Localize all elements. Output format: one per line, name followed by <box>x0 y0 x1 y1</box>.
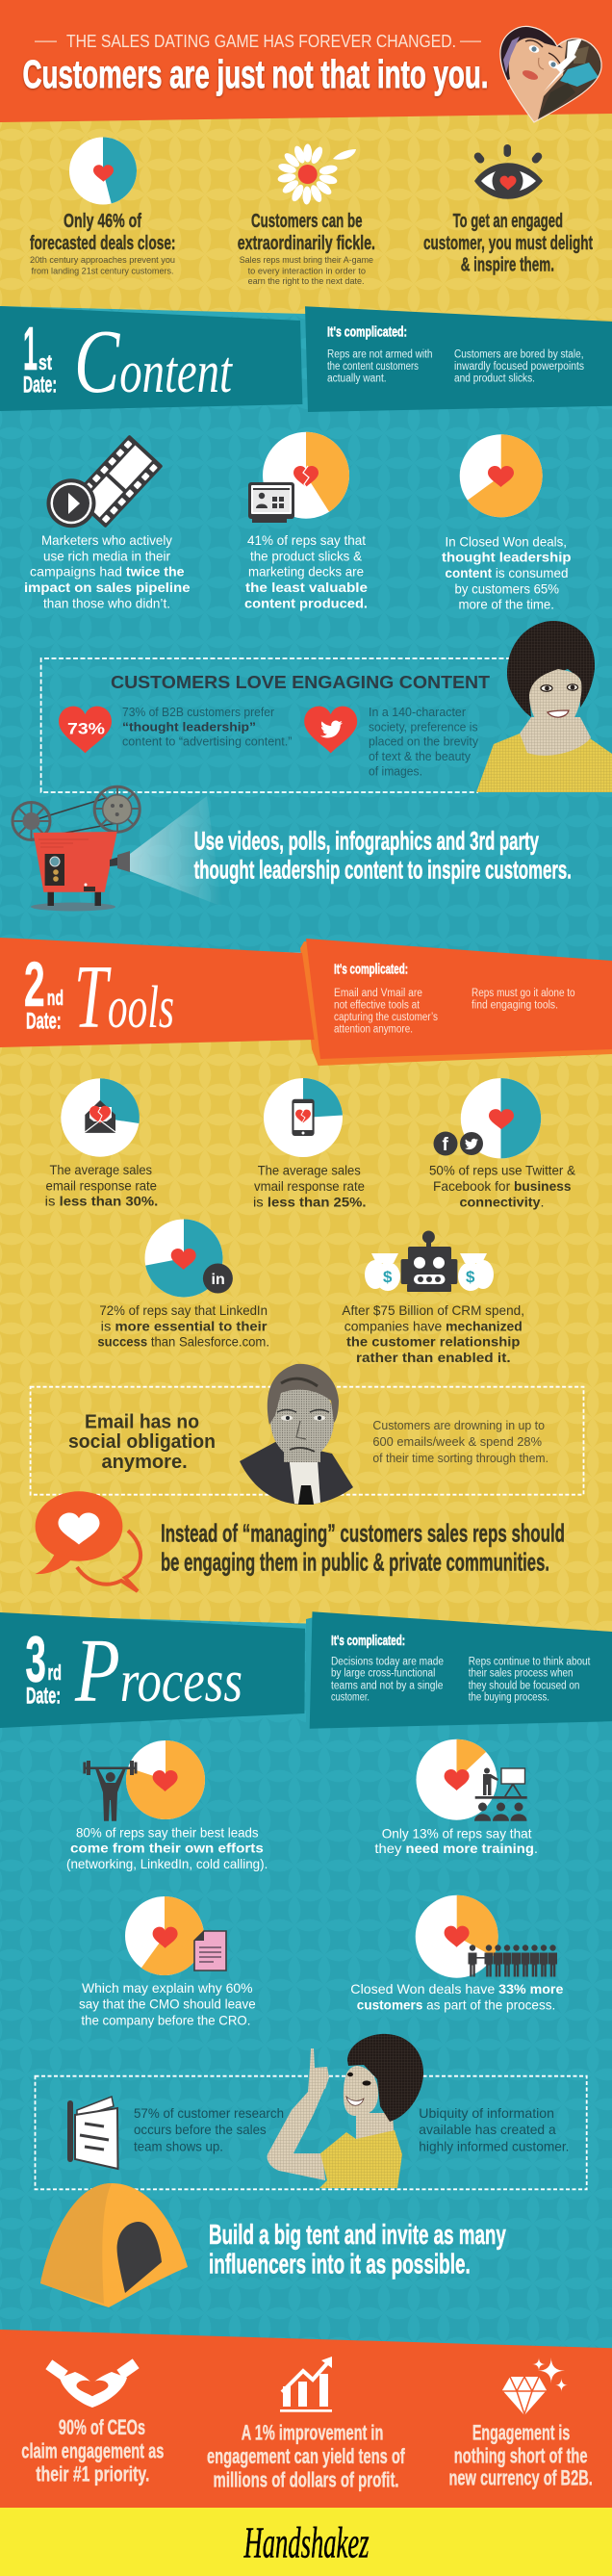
text: 600 emails/week & spend 28% <box>372 1434 542 1449</box>
text: ubiquity: Ubiquity of information <box>419 2105 554 2121</box>
text: campaigns had twice the <box>30 564 185 580</box>
footer band <box>0 2330 612 2509</box>
stat: linkedin <box>97 1219 269 1350</box>
text <box>30 255 175 277</box>
text: it's complicated: not effective tools at <box>334 1000 421 1012</box>
text: The average sales <box>258 1163 361 1178</box>
stat: training <box>374 1739 538 1856</box>
text: it's complicated: It's complicated: <box>331 1633 405 1649</box>
text: companies have mechanized <box>344 1318 523 1333</box>
icon: heart with twitter bird <box>304 707 357 753</box>
text: content produced. <box>244 595 368 610</box>
text: it's complicated: actually want. <box>327 374 387 385</box>
text: customers as part of the process. <box>357 1997 555 2013</box>
text: say that the CMO should leave <box>79 1996 256 2012</box>
text: it's complicated: Decisions today are made <box>331 1656 444 1667</box>
heading: & inspire them. <box>461 255 554 276</box>
text <box>45 1162 158 1209</box>
text <box>350 1981 564 2013</box>
text: it's complicated: their sales process when <box>469 1668 574 1680</box>
text <box>97 1302 269 1350</box>
text: thought leadership <box>122 705 293 749</box>
heading <box>238 211 375 254</box>
text: brevity: of images. <box>369 763 422 778</box>
text: it's complicated: teams and not by a single <box>331 1680 443 1691</box>
text: thought leadership: 73% of B2B customers prefer <box>122 705 275 719</box>
stat: rich media <box>24 434 191 610</box>
heading: Customers can be <box>251 211 362 232</box>
text: 57 percent: 57% of customer research <box>134 2105 284 2121</box>
icon: heart 73% <box>59 707 112 753</box>
text: it's complicated: capturing the customer’s <box>334 1012 438 1023</box>
icon: rising chart <box>280 2357 332 2412</box>
text: brevity: placed on the brevity <box>369 734 478 749</box>
text <box>24 532 191 610</box>
text: success than Salesforce.com. <box>97 1334 269 1350</box>
heading <box>68 1411 216 1473</box>
stat: CRM spend <box>342 1230 524 1365</box>
section header: 2nd date tools <box>0 938 612 1066</box>
panel: customer research <box>35 2034 587 2189</box>
pie chart: 13 percent <box>416 1739 497 1820</box>
text: 50% of reps use Twitter & <box>429 1163 576 1178</box>
icon: linkedin <box>203 1263 233 1294</box>
illustration: tent <box>40 2183 188 2307</box>
pie chart: 46 percent <box>69 137 137 204</box>
pie chart: 33 percent <box>416 1895 498 1978</box>
heading: Only 46% of <box>64 211 141 232</box>
text: they need more training . <box>374 1841 538 1856</box>
icon: speech bubbles with heart <box>35 1491 140 1591</box>
text <box>342 1302 524 1365</box>
text: brevity: In a 140-character <box>369 705 467 719</box>
heading: CUSTOMERS LOVE ENGAGING CONTENT <box>111 672 491 692</box>
icon: presenter and audience <box>474 1767 527 1821</box>
heading: 1st date: Date: <box>23 372 57 398</box>
text: it's complicated: they should be focused on <box>469 1680 579 1691</box>
text: thought leadership: “thought leadership” <box>122 719 256 734</box>
pie chart: 41 percent <box>263 432 349 519</box>
stat: engagement profit <box>207 2357 405 2491</box>
text: thought leadership <box>442 550 572 565</box>
heading: anymore. <box>102 1452 188 1473</box>
text: 80% of reps say their best leads <box>76 1824 259 1840</box>
text: Only 13% of reps say that <box>382 1825 532 1841</box>
text: brevity: society, preference is <box>369 719 478 734</box>
pie chart: 60 percent <box>125 1896 204 1975</box>
text: the company before the CRO. <box>81 2012 250 2027</box>
heading: extraordinarily fickle. <box>238 233 375 254</box>
icon: handshake and crowd <box>468 1945 557 1977</box>
illustration: film projector <box>13 786 222 911</box>
text: email response rate <box>46 1177 157 1193</box>
icon: heart 73%: 73% <box>67 720 105 738</box>
heading: process: Process <box>74 1621 242 1721</box>
stat: new currency <box>448 2357 593 2490</box>
text: rather than enabled it. <box>356 1350 511 1365</box>
text <box>207 2420 405 2491</box>
text: millions of dollars of profit. <box>214 2467 399 2491</box>
icon: linkedin: in <box>212 1272 225 1288</box>
text: it's complicated: It's complicated: <box>327 323 407 340</box>
callout: build a big tent: influencers into it as possible. <box>209 2250 471 2280</box>
text: engagement can yield tens of <box>207 2444 405 2468</box>
text: Which may explain why 60% <box>82 1980 252 1996</box>
icon: weightlifter <box>83 1761 137 1821</box>
text: is less than 30%. <box>45 1194 158 1209</box>
heading: 1st date: 1 <box>23 314 38 383</box>
heading <box>423 211 593 276</box>
text: the customer relationship <box>346 1334 520 1350</box>
text: In Closed Won deals, <box>445 533 567 549</box>
header band <box>0 0 612 130</box>
text: it's complicated <box>334 962 575 1035</box>
text: brevity <box>369 705 478 778</box>
heading: 3rd date: 3 <box>25 1623 46 1696</box>
section header: 1st date content <box>0 306 612 412</box>
text <box>253 1163 366 1209</box>
text: is less than 25%. <box>253 1194 366 1209</box>
text: 72% of reps say that LinkedIn <box>99 1302 268 1318</box>
stat: thought leadership 65 percent <box>442 434 572 612</box>
heading: Email has no <box>85 1411 199 1432</box>
text: content is consumed <box>445 565 568 580</box>
text <box>244 532 368 610</box>
callout: use videos <box>194 827 572 885</box>
text: earn the right to the next date. <box>248 276 365 287</box>
text: it's complicated <box>331 1633 591 1704</box>
icon: envelope with broken heart <box>85 1100 115 1133</box>
heading: 2nd date: nd <box>47 986 64 1010</box>
text <box>66 1824 268 1871</box>
text <box>21 2415 164 2486</box>
heading: 2nd date: Date: <box>26 1008 62 1034</box>
text: 57 percent <box>134 2105 284 2153</box>
text <box>429 1163 576 1209</box>
text <box>372 1418 548 1465</box>
text: 90% of CEOs <box>59 2415 145 2439</box>
text: more of the time. <box>458 597 554 612</box>
icon: twitter <box>460 1132 483 1155</box>
text: it's complicated: the buying process. <box>469 1692 549 1704</box>
text: Sales reps must bring their A-game <box>240 255 373 266</box>
text: from landing 21st century customers. <box>31 267 173 277</box>
panel: customers love engaging content <box>41 621 612 792</box>
photo: worried man in suit <box>240 1364 353 1505</box>
text: to every interaction in order to <box>248 267 366 277</box>
heading: 2nd date: 2 <box>24 948 45 1019</box>
text: it's complicated: by large cross-functional <box>331 1668 435 1680</box>
text: connectivity. <box>460 1194 545 1209</box>
text: thought leadership: content to “advertising content.” <box>122 734 293 749</box>
text: it's complicated: Reps are not armed with <box>327 349 433 361</box>
text: it's complicated: attention anymore. <box>334 1023 413 1035</box>
text: of their time sorting through them. <box>372 1451 548 1465</box>
icon: book <box>67 2097 117 2169</box>
pie chart: 50 percent <box>461 1078 541 1158</box>
text: it's complicated: customer. <box>331 1692 370 1704</box>
text: than those who didn’t. <box>43 595 170 610</box>
text: it's complicated: inwardly focused powerpoints <box>454 361 584 373</box>
illustration: broken heart portrait <box>499 25 602 123</box>
text: it's complicated: It's complicated: <box>334 962 408 978</box>
callout: build a big tent <box>209 2220 506 2280</box>
icon: daisy losing a petal <box>277 144 356 205</box>
text <box>442 533 572 612</box>
heading: content: Content <box>74 312 233 412</box>
text <box>79 1980 256 2027</box>
text: 57 percent: team shows up. <box>134 2138 223 2153</box>
text: 20th century approaches prevent you <box>30 255 175 266</box>
text: 57 percent: occurs before the sales <box>134 2122 267 2137</box>
stat: 41 percent least valuable <box>244 432 368 610</box>
icon: diamond with sparkles <box>502 2357 568 2415</box>
footer: logo strip <box>0 2508 612 2576</box>
text: vmail response rate <box>254 1178 365 1194</box>
text: impact on sales pipeline <box>24 580 191 595</box>
text: use rich media in their <box>43 548 170 563</box>
text <box>374 1825 538 1856</box>
heading: tools: Tools <box>74 947 174 1047</box>
heading: 3rd date: rd <box>48 1661 62 1685</box>
heading <box>30 211 175 254</box>
icon: phone with broken heart <box>292 1099 315 1136</box>
panel: email has no social obligation <box>31 1364 584 1505</box>
icon: robot with money bags: $ <box>383 1268 393 1286</box>
text: ubiquity <box>419 2105 570 2153</box>
icon: facebook: f <box>443 1135 448 1155</box>
logo: Handshakez: Handshakez <box>243 2518 370 2567</box>
icon: hands forming heart <box>45 2358 140 2408</box>
text: is more essential to their <box>101 1318 268 1333</box>
icon: monitor <box>248 482 294 523</box>
text: 41% of reps say that <box>247 532 366 548</box>
text <box>240 255 373 287</box>
intro: fickle customers <box>238 144 375 287</box>
stat: 33 percent more customers <box>350 1895 564 2013</box>
callout: instead of managing <box>161 1519 565 1577</box>
pie chart: 80 percent <box>126 1740 205 1819</box>
text: Marketers who actively <box>41 532 172 548</box>
icon: document <box>194 1931 226 1971</box>
text: it's complicated: find engaging tools. <box>472 1000 558 1012</box>
text: claim engagement as <box>21 2438 164 2462</box>
icon: robot with money bags <box>365 1230 494 1292</box>
section header: 3rd date process <box>0 1611 612 1729</box>
text: ubiquity: highly informed customer. <box>419 2138 570 2153</box>
heading: 3rd date: Date: <box>26 1683 61 1709</box>
stat: vmail response rate <box>253 1078 366 1209</box>
subtitle: THE SALES DATING GAME HAS FOREVER CHANGED. <box>66 32 456 51</box>
text: marketing decks are <box>248 564 364 580</box>
pie chart: 72 percent <box>144 1219 223 1298</box>
text: it's complicated: the content customers <box>327 361 419 373</box>
text: Closed Won deals have 33% more <box>350 1981 564 1996</box>
heading: 1st date: st <box>38 350 52 374</box>
photo: smiling woman with dark hair <box>476 621 612 792</box>
text: A 1% improvement in <box>242 2420 383 2444</box>
photo: woman pointing upward <box>268 2034 423 2188</box>
icon: film strip with play button <box>46 434 164 528</box>
intro: 46% of deals close <box>30 137 175 277</box>
text: the least valuable <box>245 580 368 595</box>
stat: CMO <box>79 1896 256 2027</box>
text: brevity: of text & the beauty <box>369 749 471 763</box>
text <box>448 2420 593 2490</box>
text: come from their own efforts <box>70 1840 264 1855</box>
pie chart: 65 percent <box>460 434 543 517</box>
pie chart: vmail <box>264 1078 343 1157</box>
icon: facebook <box>433 1132 458 1155</box>
heading: social obligation <box>68 1431 216 1453</box>
heading: forecasted deals close: <box>30 233 175 254</box>
text: it's complicated: Reps must go it alone to <box>472 988 575 999</box>
text: Customers are drowning in up to <box>372 1418 545 1432</box>
text: it's complicated: Customers are bored by stale, <box>454 349 583 361</box>
icon: robot with money bags: $ <box>466 1268 475 1286</box>
text: Facebook for business <box>433 1178 572 1194</box>
text: the product slicks & <box>250 548 363 563</box>
stat: email response rate <box>45 1078 158 1209</box>
text: ubiquity: available has created a <box>419 2122 556 2137</box>
stat: best leads <box>66 1740 268 1871</box>
text: it's complicated <box>327 323 584 385</box>
text: it's complicated: and product slicks. <box>454 374 535 385</box>
icon: eye with heart <box>472 144 544 199</box>
text: their #1 priority. <box>36 2461 149 2486</box>
text: it's complicated: Reps continue to think about <box>469 1656 591 1667</box>
text: by customers 65% <box>454 580 559 596</box>
text: The average sales <box>50 1162 152 1177</box>
stat: twitter and facebook <box>429 1078 576 1209</box>
text: (networking, LinkedIn, cold calling). <box>66 1856 268 1871</box>
text: After $75 Billion of CRM spend, <box>342 1302 524 1318</box>
text: it's complicated: Email and Vmail are <box>334 988 422 999</box>
pie chart: email <box>61 1078 140 1157</box>
intro: delight and inspire <box>423 144 593 276</box>
stat: CEOs <box>21 2358 164 2486</box>
